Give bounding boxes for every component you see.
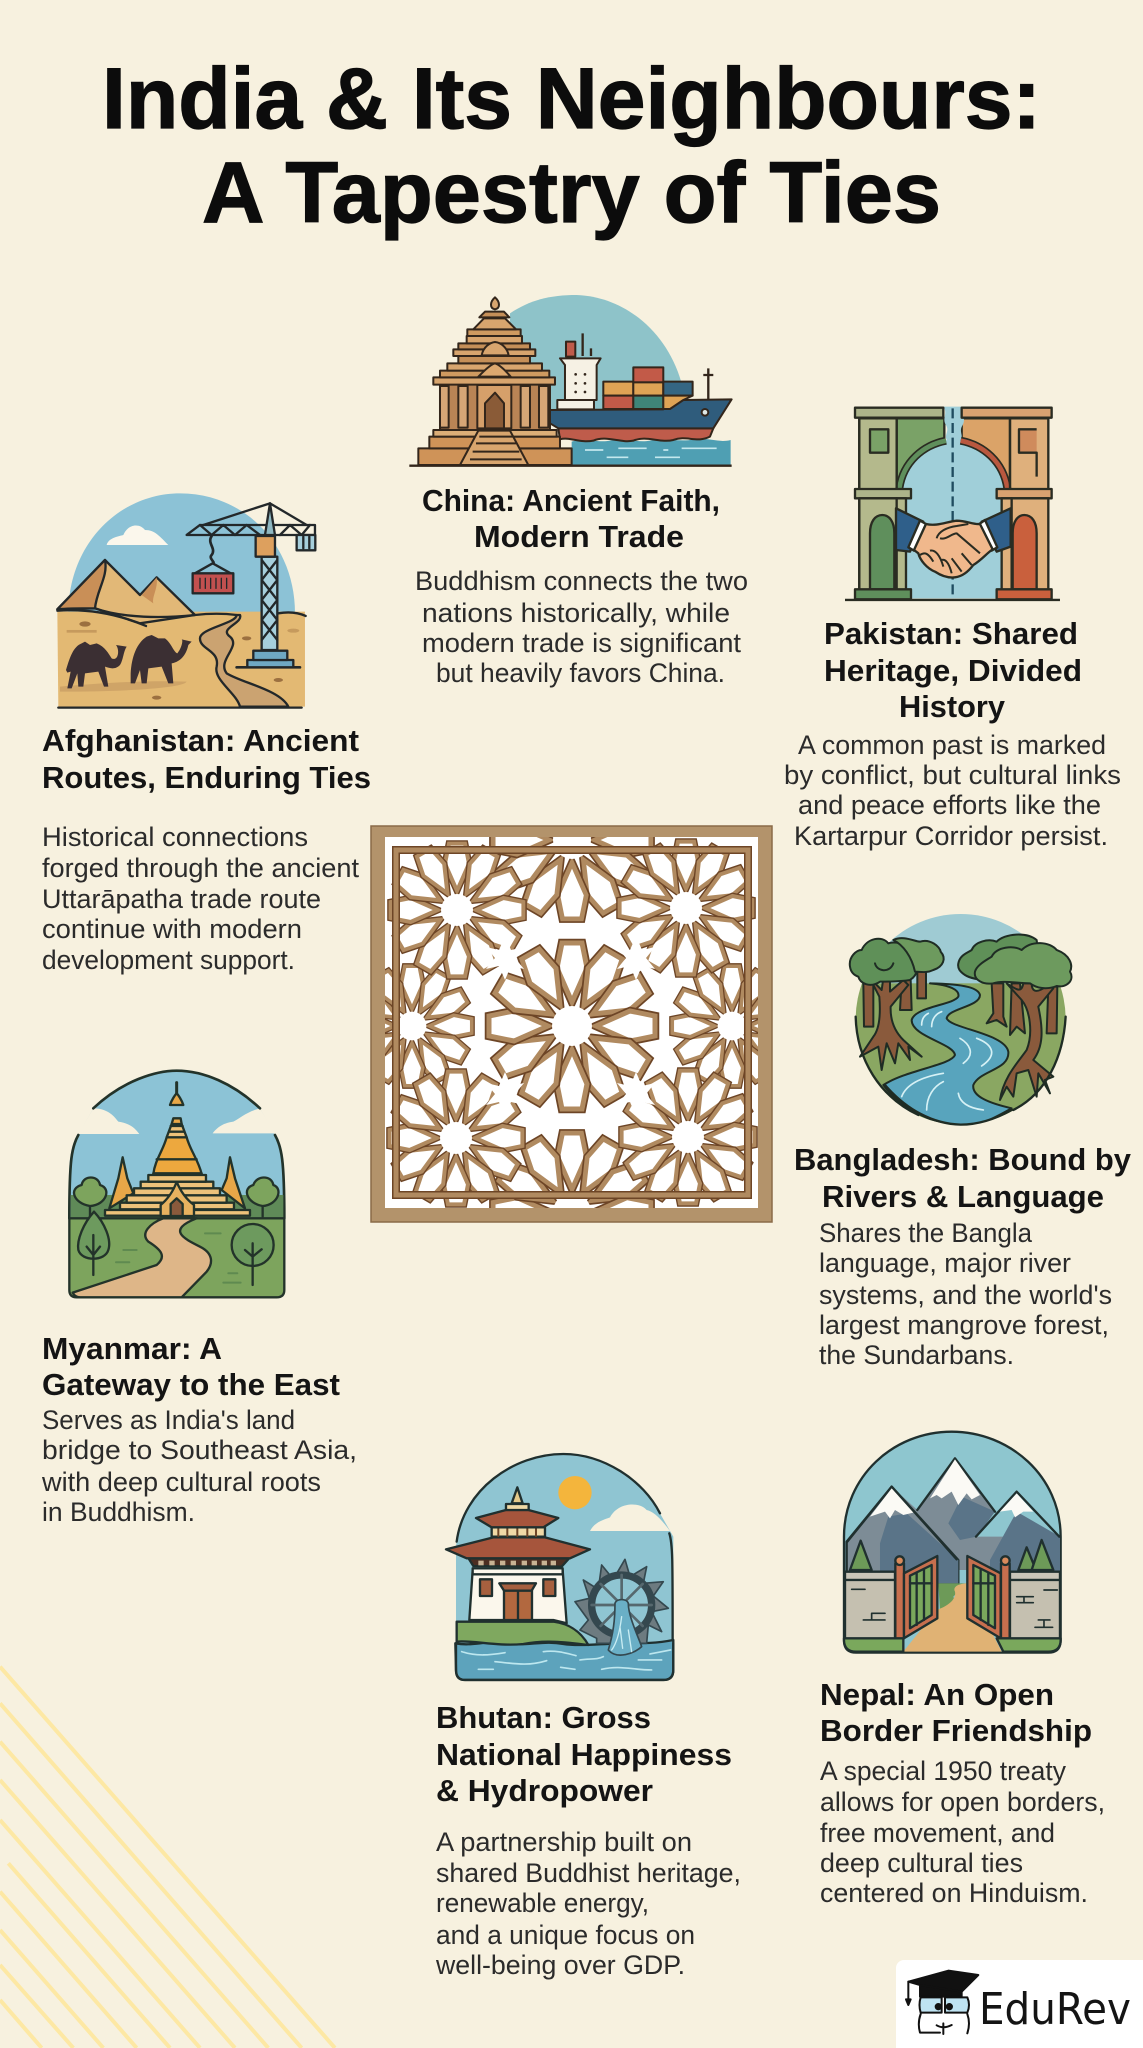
title [102, 51, 1041, 241]
text: bangladesh description [819, 1218, 1112, 1370]
text: china description: but heavily favors China. [436, 658, 725, 688]
icon: river and mangroves [850, 913, 1071, 1127]
panel: pakistan [784, 407, 1121, 851]
heading: nepal [820, 1677, 1092, 1748]
panel: bhutan [435, 1453, 741, 1980]
heading: afghanistan: Afghanistan: Ancient [42, 723, 359, 758]
text: pakistan description: and peace efforts like the [798, 790, 1101, 820]
logo: EduRev: EduRev [979, 1984, 1131, 2035]
icon: dzong and water wheel [446, 1453, 673, 1680]
title: A Tapestry of Ties [202, 145, 941, 241]
icon: desert, camels and crane [57, 493, 315, 708]
text: afghanistan description: Historical connections [42, 822, 308, 852]
text: pakistan description: by conflict, but cultural links [784, 760, 1121, 790]
text: afghanistan description [42, 822, 359, 975]
icon: split arch with handshake [845, 407, 1060, 600]
panel: myanmar [41, 1071, 357, 1527]
text: bhutan description: renewable energy, [436, 1888, 649, 1918]
text: myanmar description: with deep cultural roots [41, 1467, 321, 1497]
icon: mountains and open gate [844, 1432, 1061, 1653]
heading: nepal: Border Friendship [820, 1713, 1092, 1748]
heading: bhutan: & Hydropower [436, 1773, 653, 1808]
text: bhutan description: well-being over GDP. [435, 1950, 685, 1980]
decorative yellow diagonal stripes [0, 1667, 335, 2048]
text: nepal description: A special 1950 treaty [820, 1756, 1066, 1786]
text: china description: modern trade is significant [422, 628, 742, 658]
heading: bangladesh: Rivers & Language [822, 1179, 1104, 1214]
heading: pakistan [824, 616, 1082, 724]
heading: bhutan [436, 1700, 732, 1808]
heading: bangladesh: Bangladesh: Bound by [794, 1142, 1132, 1177]
heading: china [422, 483, 720, 554]
heading: china: Modern Trade [474, 519, 684, 554]
text: afghanistan description: continue with modern [42, 914, 302, 944]
text: nepal description: free movement, and [820, 1818, 1055, 1848]
text: bhutan description: A partnership built on [436, 1827, 692, 1857]
text: myanmar description: bridge to Southeast Asia, [42, 1435, 357, 1465]
title: India & Its Neighbours: [102, 51, 1041, 147]
text: nepal description: deep cultural ties [820, 1848, 1023, 1878]
text: nepal description: centered on Hinduism. [820, 1878, 1088, 1908]
heading: pakistan: History [899, 689, 1006, 724]
panel: afghanistan [42, 493, 371, 975]
text: bangladesh description: language, major river [819, 1248, 1071, 1278]
text: afghanistan description: forged through the ancient [42, 853, 359, 883]
text: china description: nations historically, while [422, 598, 730, 628]
heading: bhutan: Bhutan: Gross [436, 1700, 651, 1735]
text: afghanistan description: Uttarāpatha trade route [42, 884, 321, 914]
text: pakistan description [784, 730, 1121, 851]
heading: bhutan: National Happiness [436, 1737, 732, 1772]
text: bangladesh description: systems, and the world's [819, 1280, 1112, 1310]
text: bangladesh description: largest mangrove forest, [819, 1310, 1109, 1340]
text: nepal description [820, 1756, 1105, 1908]
text: bangladesh description: the Sundarbans. [819, 1340, 1014, 1370]
icon: golden pagoda [69, 1071, 284, 1297]
text: bhutan description: and a unique focus on [436, 1920, 695, 1950]
heading: pakistan: Heritage, Divided [824, 653, 1082, 688]
heading: bangladesh [794, 1142, 1132, 1214]
panel: china [409, 295, 748, 688]
heading: china: China: Ancient Faith, [422, 483, 720, 518]
text: bhutan description: shared Buddhist heritage, [436, 1858, 741, 1888]
logo: EduRev [896, 1960, 1143, 2048]
text: myanmar description [41, 1405, 357, 1527]
text: bhutan description [435, 1827, 741, 1980]
heading: myanmar [42, 1331, 340, 1402]
text: myanmar description: in Buddhism. [42, 1497, 195, 1527]
heading: myanmar: Gateway to the East [42, 1367, 340, 1402]
panel: nepal [820, 1432, 1105, 1908]
panel: bangladesh [794, 913, 1132, 1370]
central lattice panel [370, 825, 773, 1223]
heading: afghanistan: Routes, Enduring Ties [42, 760, 371, 795]
text: china description: Buddhism connects the two [415, 566, 748, 596]
heading: pakistan: Pakistan: Shared [824, 616, 1078, 651]
heading: myanmar: Myanmar: A [42, 1331, 222, 1366]
text: afghanistan description: development support. [42, 945, 295, 975]
heading: nepal: Nepal: An Open [820, 1677, 1054, 1712]
text: pakistan description: Kartarpur Corridor persist. [794, 821, 1108, 851]
text: myanmar description: Serves as India's land [42, 1405, 295, 1435]
text: nepal description: allows for open borders, [820, 1787, 1105, 1817]
icon: graduation cap mascot [906, 1971, 978, 2034]
text: pakistan description: A common past is marked [798, 730, 1106, 760]
text: china description [415, 566, 748, 688]
icon: temple and cargo ship [409, 295, 732, 466]
heading: afghanistan [42, 723, 371, 795]
text: bangladesh description: Shares the Bangla [819, 1218, 1033, 1248]
